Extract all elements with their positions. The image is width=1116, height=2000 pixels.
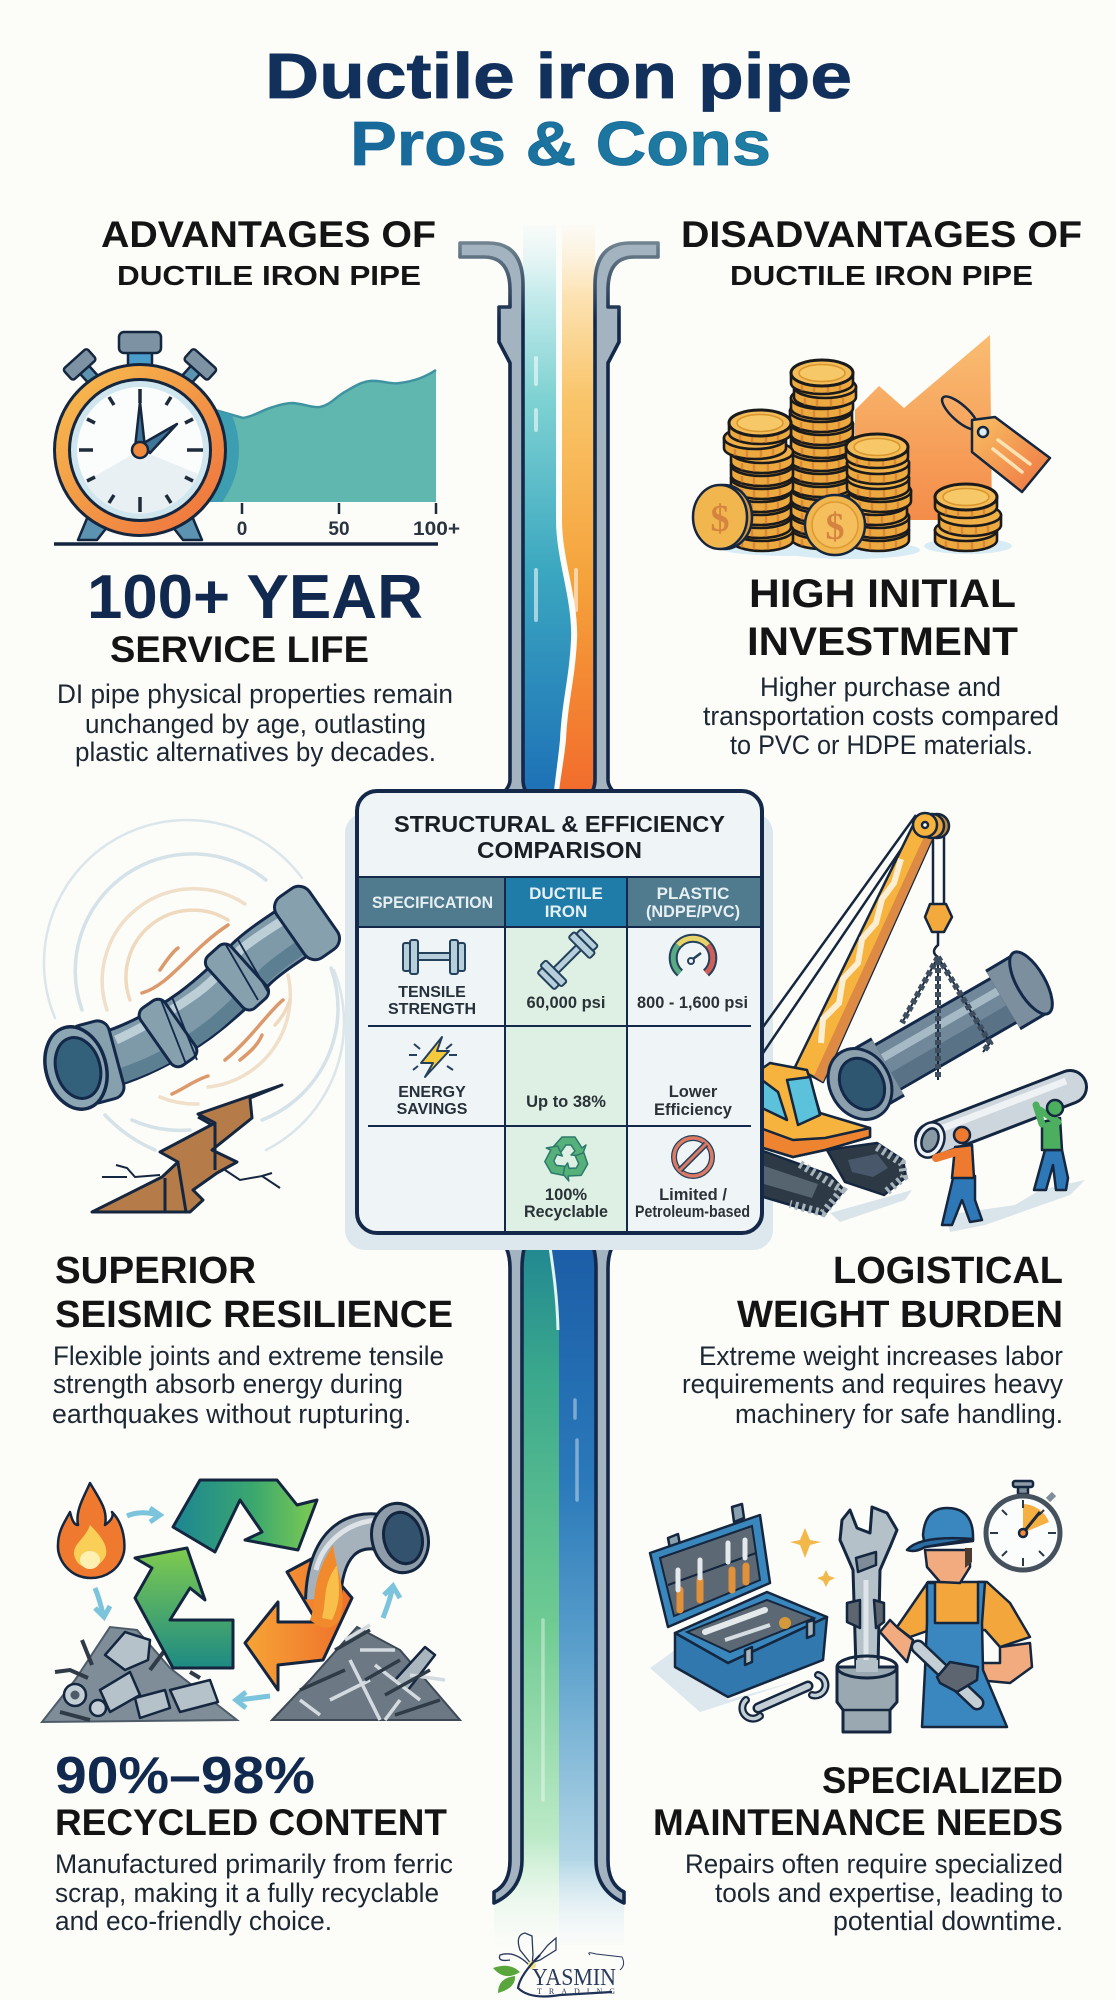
icon: stopwatch with service life chart [54,332,460,544]
left pipe wall [460,243,532,802]
left coin stack [724,410,793,551]
scrap pile left [42,1627,237,1722]
right coin stack [845,434,911,551]
value: ductile tensile: 60,000 psi [527,994,605,1012]
recycling arrow: top [173,1480,317,1552]
value: plastic energy [654,1083,733,1119]
small coin stack [935,484,1001,551]
icon: recycle symbol [539,1137,592,1185]
icon: stopwatch [986,1481,1060,1570]
recycling arrow: right orange [245,1556,352,1690]
stat: 100+ year service life [87,563,423,670]
value: plastic tensile: 800 - 1,600 psi [637,994,748,1012]
text: seismic description: earthquakes without rupturing. [52,1399,411,1429]
chart axis ticks and labels: 50 [328,519,350,540]
process arrows [95,1508,400,1708]
text: weight description [682,1341,1063,1429]
pipe opening [36,1019,116,1117]
heading: high initial investment [747,572,1018,664]
icon: dumbbell [403,940,465,974]
title: Pros & Cons [350,110,771,179]
chart axis ticks and labels [237,503,460,540]
heading: disadvantages: DUCTILE IRON PIPE [730,260,1033,291]
stat: 100+ year service life: SERVICE LIFE [110,629,369,670]
crane cables [763,815,944,1053]
stat: 90 to 98 percent recycled content [55,1747,447,1843]
table header row: SPECIFICATION [372,893,493,912]
silver pipe carried by workers [911,1081,1070,1162]
heading: superior seismic resilience: SEISMIC RESILIENCE [55,1294,453,1336]
central pipe: lower section [494,1230,624,1945]
crane tracks [760,1143,912,1222]
value: plastic recyclability [635,1186,750,1221]
price tag [938,392,1050,492]
heading: specialized maintenance needs: SPECIALIZED [822,1760,1063,1801]
large dollar coins: $ [710,498,730,540]
text: maintenance description [685,1849,1063,1936]
large dollar coins: $ [826,506,844,548]
text: service life description: DI pipe physical properties remain [57,679,453,709]
heading: logistical weight burden: LOGISTICAL [833,1250,1063,1292]
text: investment description: transportation costs compared [703,701,1059,731]
heading: logistical weight burden: WEIGHT BURDEN [737,1294,1063,1336]
value: plastic energy: Efficiency [654,1101,733,1119]
panel shadow [345,813,773,1250]
heading: disadvantages: DISADVANTAGES OF [681,214,1082,255]
right lower wall [588,1233,624,1903]
icon: flexible pipe over earthquake crack [36,820,345,1212]
stat: 90 to 98 percent recycled content: 90%–98% [55,1747,315,1805]
table header row: PLASTIC [657,884,729,903]
icon: prohibited sign [674,1138,712,1176]
fluid: blue stream [548,1230,624,1945]
hook and chains [902,904,990,1080]
large dollar coins [693,485,865,555]
icon: crane lifting heavy pipe with workers [760,813,1085,1232]
lifted pipe [816,946,1061,1131]
crane boom [795,817,933,1082]
text: investment description: Higher purchase and [760,672,1001,702]
heading: superior seismic resilience [55,1250,453,1336]
text: weight description: Extreme weight increases labor [699,1341,1063,1371]
title [265,40,852,179]
right pipe wall [586,243,658,802]
table header row: DUCTILE [529,884,603,903]
panel title: COMPARISON [477,837,642,863]
toolbox [650,1504,827,1712]
text: recycled description: and eco-friendly choice. [55,1906,332,1936]
chart axis ticks and labels: 0 [237,519,247,540]
text: maintenance description: Repairs often require specialized [685,1849,1063,1879]
heading: advantages: ADVANTAGES OF [101,214,436,255]
heading: disadvantages [681,214,1082,291]
fluid: green stream [494,1230,559,1945]
label: energy savings [397,1084,468,1118]
table header row [359,877,760,927]
heading: superior seismic resilience: SUPERIOR [55,1250,256,1292]
left lower wall [494,1233,530,1903]
value: plastic recyclability: Limited / [659,1186,727,1204]
sparkles [790,1528,835,1587]
icon: coin stacks with cost chart and price tag [693,335,1050,559]
logo: Yasmin Trading [493,1933,624,1996]
value: ductile recyclable: 100% [545,1186,587,1204]
panel title [394,811,725,863]
big adjustable wrench in pipe socket [840,1507,897,1668]
fluid: disadvantages orange stream [558,225,595,800]
text: maintenance description: tools and expertise, leading to [715,1878,1063,1908]
icon: flame [58,1483,124,1578]
text: recycled description: Manufactured primarily from ferric [55,1849,453,1879]
text: service life description: unchanged by age, outlasting [85,709,426,739]
text: recycled description: scrap, making it a fully recyclable [55,1878,439,1908]
label: tensile strength: STRENGTH [388,1001,476,1018]
stat: 100+ year service life: 100+ YEAR [87,563,423,632]
panel: structural and efficiency comparison [357,791,762,1233]
icon: diagonal dumbbell [535,927,600,992]
fluid: advantages blue stream [523,225,571,800]
value: plastic recyclability: Petroleum-based [635,1203,750,1221]
recycling arrow: left [135,1548,233,1668]
central pipe: upper section [460,225,658,802]
text: weight description: machinery for safe handling. [735,1399,1063,1429]
middle coin stack [790,360,856,549]
heading: high initial investment: HIGH INITIAL [749,572,1016,616]
ground crack [92,1085,282,1212]
text: seismic description: strength absorb energy during [53,1369,403,1399]
seismic waves [44,820,344,1150]
crane cab [760,1063,870,1157]
mechanic figure [847,1508,1032,1727]
heading: specialized maintenance needs [653,1760,1063,1843]
logo: Yasmin Trading: YASMIN [532,1965,616,1991]
crane pulley [913,813,949,838]
text: service life description [57,679,453,767]
panel title: STRUCTURAL & EFFICIENCY [394,811,725,837]
value: ductile recyclable [524,1186,608,1221]
text: investment description: to PVC or HDPE materials. [730,730,1033,760]
heading: specialized maintenance needs: MAINTENANCE NEEDS [653,1802,1063,1843]
loose wrench [742,1675,825,1719]
label: tensile strength [388,984,476,1018]
heading: high initial investment: INVESTMENT [747,620,1018,664]
label: energy savings: SAVINGS [397,1101,468,1118]
value: ductile energy: Up to 38% [526,1093,606,1111]
label: tensile strength: TENSILE [398,984,466,1001]
pipe body [77,913,318,1076]
pipe collars [67,881,345,1106]
icon: lightning bolt [409,1037,457,1077]
text: investment description [703,672,1059,760]
logo: Yasmin Trading: TRADING [537,1987,615,1996]
workers [936,1100,1085,1232]
text: seismic description: Flexible joints and extreme tensile [53,1341,444,1371]
text: service life description: plastic alternatives by decades. [75,737,436,767]
text: seismic description [52,1341,444,1429]
text: maintenance description: potential downtime. [833,1906,1063,1936]
heading: advantages: DUCTILE IRON PIPE [117,260,421,291]
chart axis ticks and labels: 100+ [413,519,460,540]
table header row: IRON [545,902,587,921]
pipe socket [837,1656,897,1732]
table header row: (NDPE/PVC) [646,902,740,921]
stat: 90 to 98 percent recycled content: RECYCLED CONTENT [55,1802,447,1843]
value: plastic energy: Lower [669,1083,718,1101]
title: Ductile iron pipe [265,40,852,112]
area chart [200,370,436,502]
heading: logistical weight burden [737,1250,1063,1336]
pipe elbow with flames [310,1497,436,1628]
heading: advantages [101,214,436,291]
value: ductile recyclable: Recyclable [524,1203,608,1221]
text: recycled description [55,1849,453,1936]
label: energy savings: ENERGY [398,1084,466,1101]
icon: gauge [673,938,713,973]
scrap pile right [272,1625,460,1720]
ductile column highlight [505,927,627,1231]
text: weight description: requirements and requires heavy [682,1369,1063,1399]
icon: recycling loop with scrap metal [42,1480,460,1722]
icon: mechanic with wrench, toolbox and stopwatch [650,1481,1060,1732]
